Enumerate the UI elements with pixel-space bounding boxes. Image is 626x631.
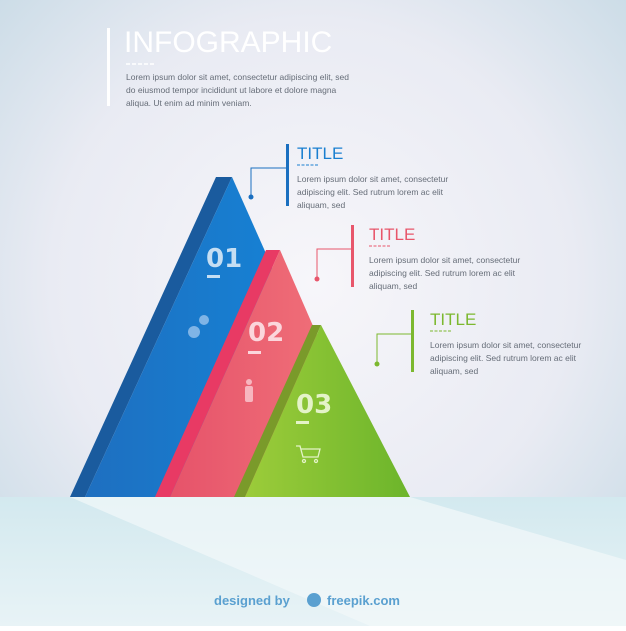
callout 3 (374, 310, 581, 376)
icon: person (245, 379, 253, 402)
triangle: red 02 (155, 250, 330, 497)
triangle: blue 01 (70, 177, 300, 497)
callout 2: Lorem ipsum dolor sit amet, consectetur (369, 255, 520, 265)
triangle: green 03 (234, 325, 410, 497)
callout 3: TITLE (430, 310, 476, 329)
callout 2: adipiscing elit. Sed rutrum lorem ac elit (369, 268, 516, 278)
callout 1 (248, 144, 448, 210)
header block: aliqua. Ut enim ad minim veniam. (126, 98, 252, 108)
floor (0, 497, 626, 626)
callout 2: aliquam, sed (369, 281, 417, 291)
footer credit: freepik.com (327, 593, 400, 608)
icon: gears (188, 315, 209, 338)
footer credit (214, 593, 400, 608)
callout 2: TITLE (369, 225, 415, 244)
header block: Lorem ipsum dolor sit amet, consectetur adipiscing elit, sed (126, 72, 349, 82)
callout 1: TITLE (297, 144, 343, 163)
header block: do eiusmod tempor incididunt ut labore et dolore magna (126, 85, 337, 95)
footer credit: designed by (214, 593, 291, 608)
callout 1: aliquam, sed (297, 200, 345, 210)
callout 1: Lorem ipsum dolor sit amet, consectetur (297, 174, 448, 184)
icon: cart (296, 446, 320, 462)
callout 2 (314, 225, 520, 291)
triangle: blue 01: 01 (206, 244, 242, 274)
callout 1: adipiscing elit. Sed rutrum lorem ac elit (297, 187, 444, 197)
header block (107, 26, 349, 108)
callout 3: Lorem ipsum dolor sit amet, consectetur (430, 340, 581, 350)
header block: INFOGRAPHIC (124, 26, 332, 59)
callout 3: aliquam, sed (430, 366, 478, 376)
callout 3: adipiscing elit. Sed rutrum lorem ac elit (430, 353, 577, 363)
triangle: red 02: 02 (248, 318, 284, 348)
triangle: green 03: 03 (296, 390, 332, 420)
